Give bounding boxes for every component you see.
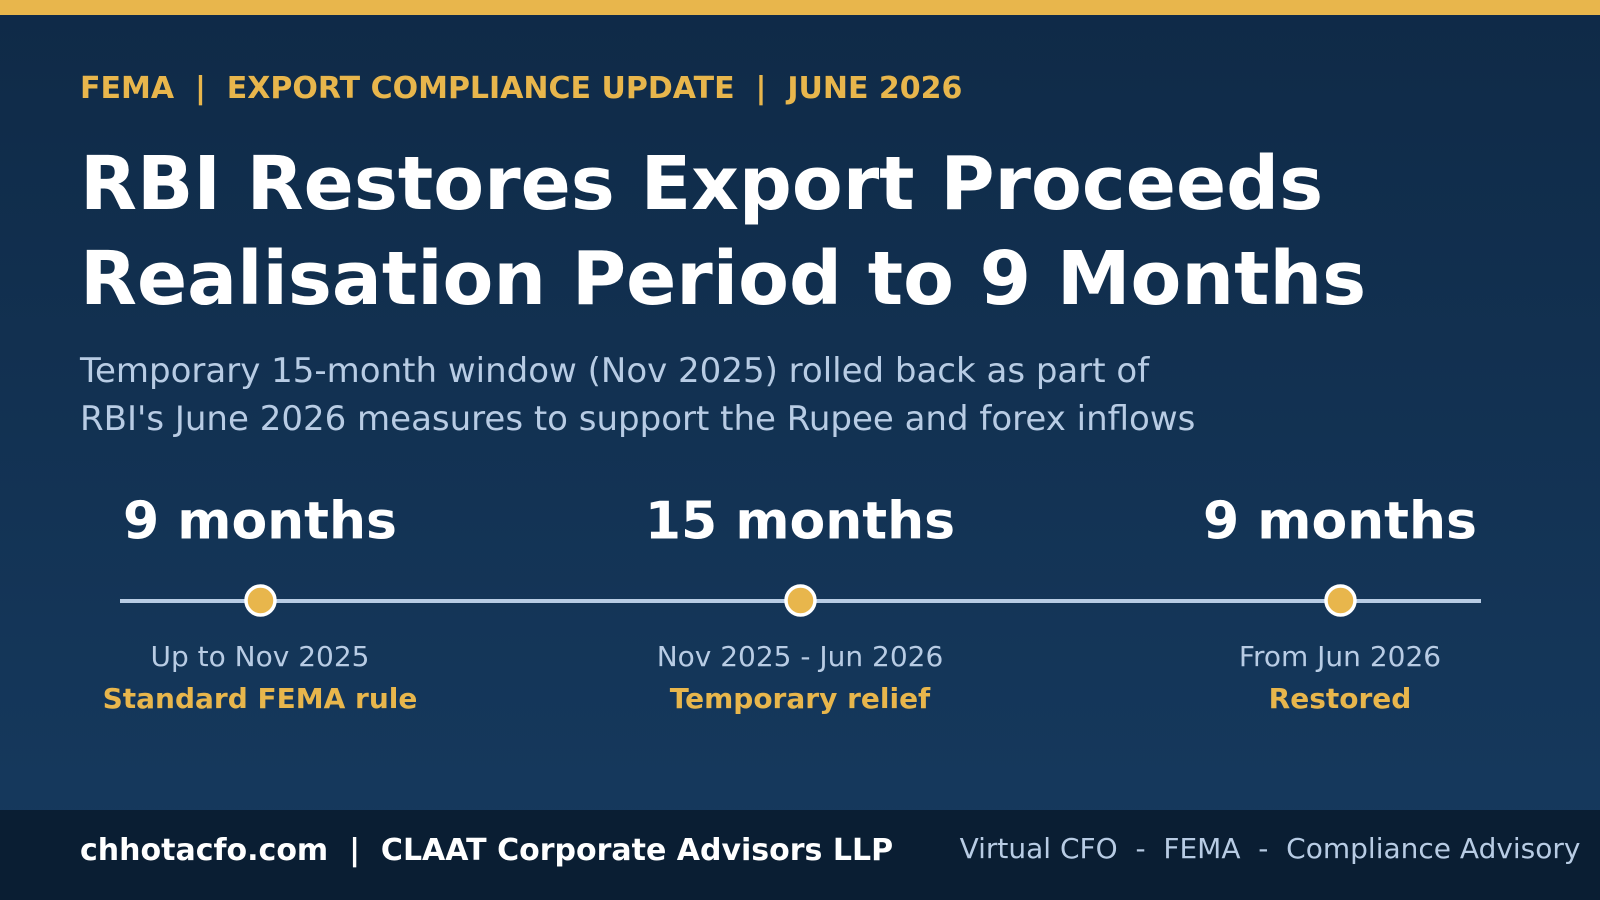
milestone: 9 months restored: From Jun 2026 bbox=[1239, 640, 1441, 673]
footer services: Virtual CFO - FEMA - Compliance Advisory bbox=[960, 832, 1580, 865]
milestone: 9 months restored: 9 months bbox=[1203, 492, 1477, 552]
top accent bar bbox=[0, 0, 1600, 15]
milestone: 15 months temporary: Temporary relief bbox=[670, 682, 931, 715]
subtitle: RBI's June 2026 measures to support the Rupee and forex inflows bbox=[80, 399, 1195, 439]
milestone: 9 months standard bbox=[103, 492, 417, 715]
milestone: 9 months standard: 9 months bbox=[123, 492, 397, 552]
timeline bbox=[103, 492, 1481, 715]
milestone: 15 months temporary bbox=[645, 492, 955, 715]
eyebrow: FEMA | EXPORT COMPLIANCE UPDATE | JUNE 2026 bbox=[80, 71, 962, 106]
milestone: 9 months standard: Up to Nov 2025 bbox=[151, 640, 369, 673]
timeline line bbox=[120, 599, 1481, 603]
subtitle bbox=[79, 351, 1195, 439]
milestone: 9 months restored: Restored bbox=[1269, 682, 1411, 715]
subtitle: Temporary 15-month window (Nov 2025) rolled back as part of bbox=[79, 351, 1150, 391]
title: Realisation Period to 9 Months bbox=[80, 236, 1366, 322]
milestone: 9 months restored bbox=[1203, 492, 1477, 715]
milestone: 15 months temporary: 15 months bbox=[645, 492, 955, 552]
title: RBI Restores Export Proceeds bbox=[80, 141, 1323, 227]
milestone: 9 months standard: Standard FEMA rule bbox=[103, 682, 417, 715]
footer band bbox=[0, 810, 1600, 900]
footer brand: chhotacfo.com | CLAAT Corporate Advisors LLP bbox=[80, 833, 893, 868]
title bbox=[80, 141, 1366, 322]
milestone: 15 months temporary: Nov 2025 - Jun 2026 bbox=[657, 640, 943, 673]
